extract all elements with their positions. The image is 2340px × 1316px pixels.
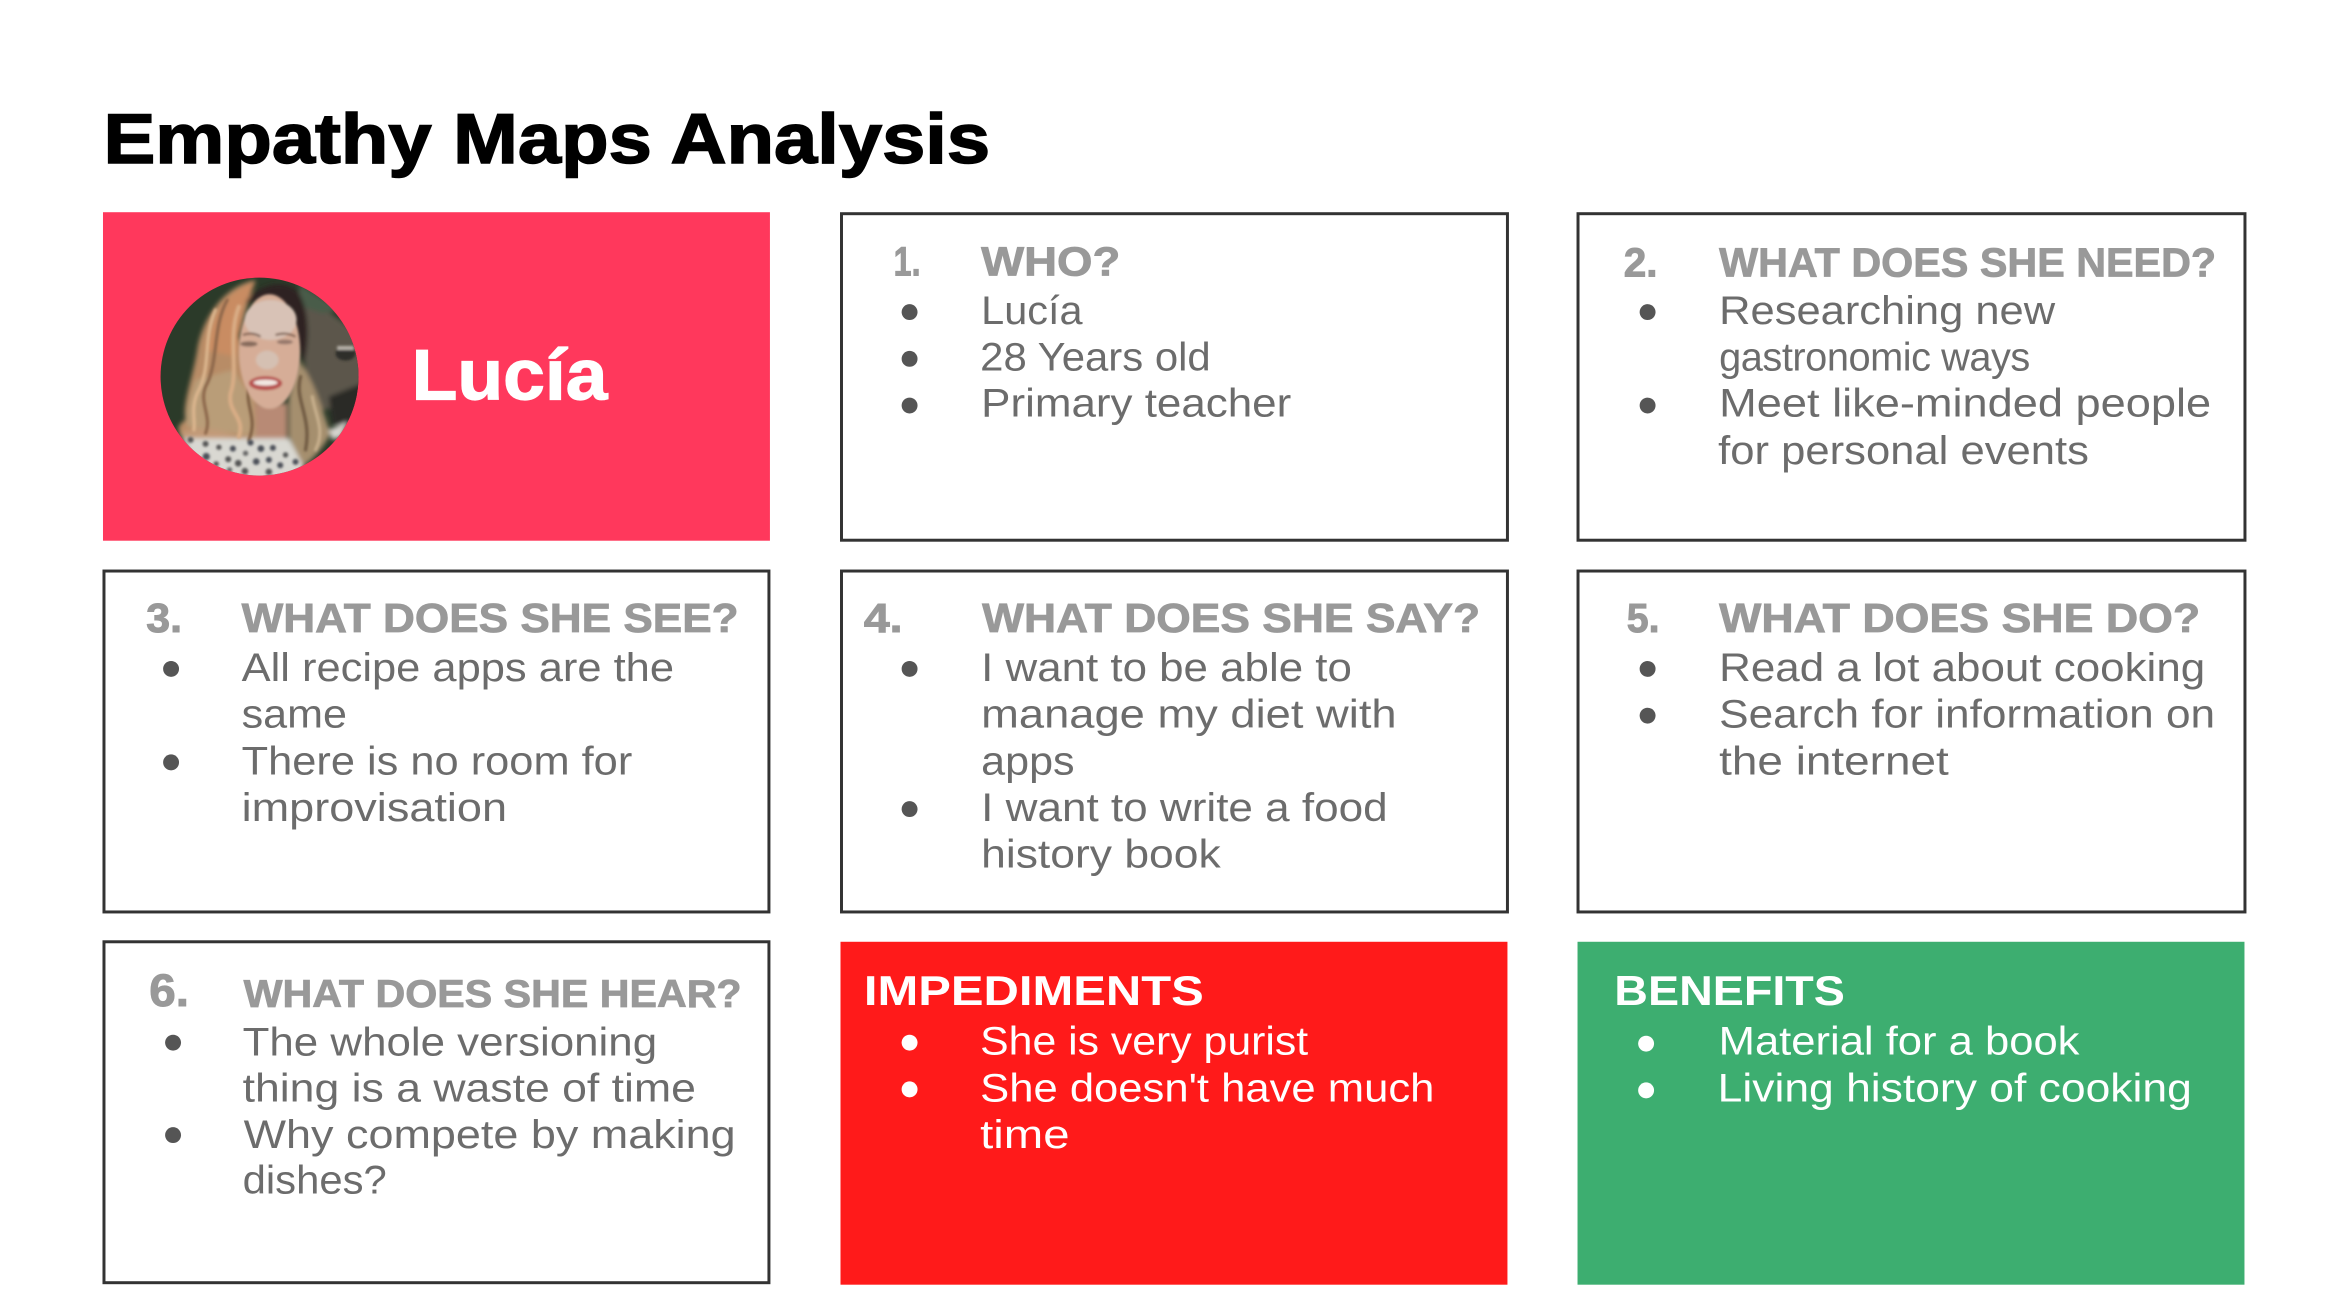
panel: 4 say: manage my diet with xyxy=(981,693,1397,737)
panel: 2 need: 2. xyxy=(1624,239,1658,285)
heading: see: WHAT DOES SHE SEE? xyxy=(242,595,739,641)
panel: 1 who: 28 Years old xyxy=(980,336,1211,380)
panel: benefits xyxy=(1578,942,2244,1285)
panel: 3 see xyxy=(104,571,769,912)
panel: 2 need: Meet like-minded people xyxy=(1719,381,2211,425)
panel: 4 say: I want to be able to xyxy=(981,646,1352,690)
heading: who: WHO? xyxy=(981,238,1120,284)
name: Lucía xyxy=(412,336,609,416)
panel: benefits: Material for a book xyxy=(1719,1020,2080,1064)
panel: impediments: time xyxy=(980,1113,1070,1157)
panel: 2 need: for personal events xyxy=(1718,429,2089,473)
panel: 2 need xyxy=(1578,214,2245,540)
panel: benefits: Living history of cooking xyxy=(1718,1066,2192,1110)
panel: 3 see: same xyxy=(242,693,347,737)
panel: 6 hear: 6. xyxy=(149,965,189,1016)
panel: 3 see: 3. xyxy=(146,595,182,641)
panel: 3 see: There is no room for xyxy=(242,739,632,783)
panel: 6 hear xyxy=(104,942,769,1283)
panel: 1 who: Primary teacher xyxy=(981,381,1291,425)
panel: 1 who: 1. xyxy=(894,238,921,284)
panel: 5 do: the internet xyxy=(1719,739,1949,783)
heading: need: WHAT DOES SHE NEED? xyxy=(1719,239,2216,285)
icon: portrait photo xyxy=(160,278,359,476)
panel: 6 hear: dishes? xyxy=(243,1159,387,1203)
heading: benefits: BENEFITS xyxy=(1614,967,1845,1014)
panel: 4 say: apps xyxy=(981,739,1075,783)
panel: 6 hear: The whole versioning xyxy=(243,1021,657,1065)
panel: 4 say: 4. xyxy=(864,595,903,641)
panel: 4 say xyxy=(841,571,1507,912)
panel: 5 do: 5. xyxy=(1627,595,1660,641)
panel: impediments: She doesn't have much xyxy=(980,1066,1434,1110)
heading: impediments: IMPEDIMENTS xyxy=(864,967,1204,1014)
heading: say: WHAT DOES SHE SAY? xyxy=(982,595,1480,641)
panel: 6 hear: thing is a waste of time xyxy=(243,1066,696,1110)
heading: do: WHAT DOES SHE DO? xyxy=(1719,595,2200,641)
panel: 5 do: Search for information on xyxy=(1719,693,2215,737)
panel: 5 do xyxy=(1578,571,2245,912)
panel: 6 hear: Why compete by making xyxy=(244,1113,736,1157)
panel: 3 see: All recipe apps are the xyxy=(242,646,674,690)
panel: persona Lucía xyxy=(103,212,770,541)
panel: 2 need: gastronomic ways xyxy=(1719,336,2030,380)
panel: 4 say: I want to write a food xyxy=(981,786,1388,830)
panel: 2 need: Researching new xyxy=(1719,289,2055,333)
panel: impediments xyxy=(841,942,1507,1285)
panel: 1 who xyxy=(841,214,1507,540)
heading: hear: WHAT DOES SHE HEAR? xyxy=(244,973,742,1016)
panel: 4 say: history book xyxy=(981,833,1221,877)
title: Empathy Maps Analysis xyxy=(103,99,990,178)
panel: 5 do: Read a lot about cooking xyxy=(1719,646,2205,690)
panel: 1 who: Lucía xyxy=(981,289,1083,333)
panel: 3 see: improvisation xyxy=(242,786,507,830)
panel: impediments: She is very purist xyxy=(980,1020,1308,1064)
